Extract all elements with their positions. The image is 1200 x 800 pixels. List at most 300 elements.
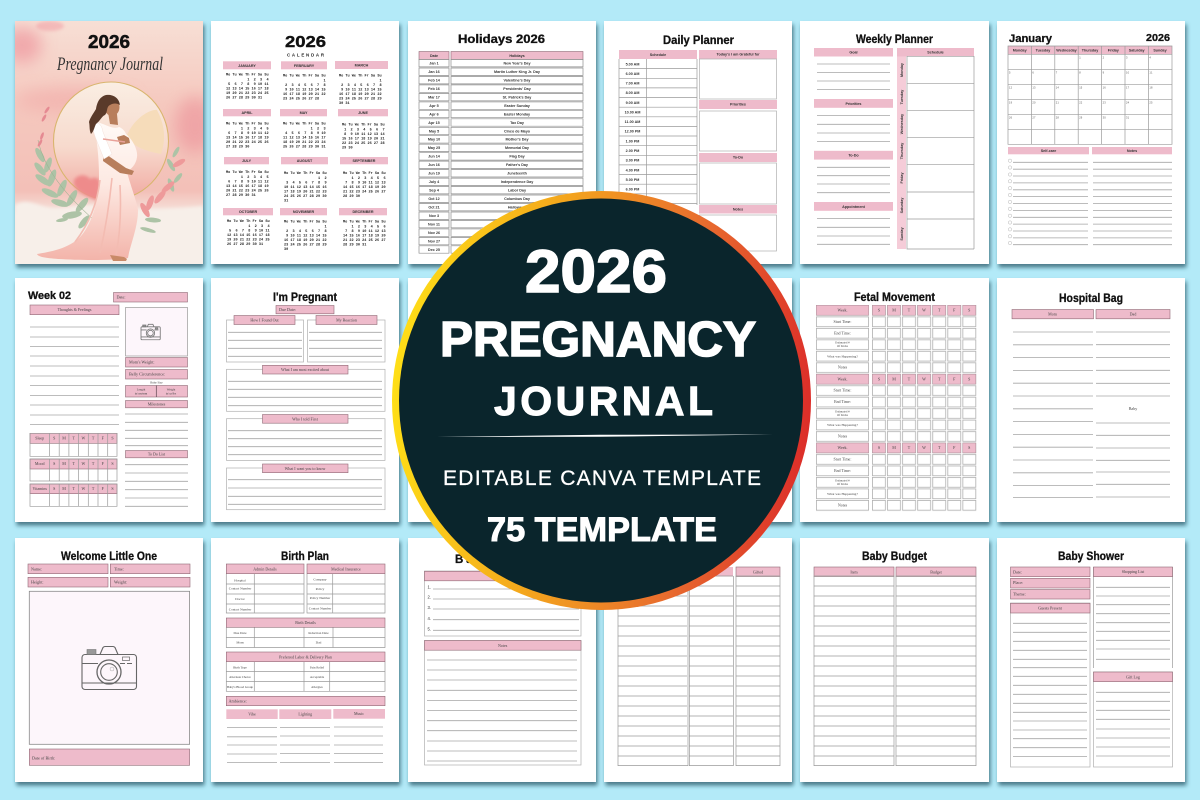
schedule column: Schedule [650,53,666,57]
names list: 5. [428,626,431,632]
mood tracker: S [111,461,114,466]
baby detail fields: Name: [31,566,42,572]
fetal movement labels: Start Time: [834,319,851,324]
vitamins tracker: S [111,486,114,491]
panel: hospital bag page [997,278,1185,522]
delivery plan table: Allergies [311,685,324,689]
fetal movement labels: Notes [838,365,848,370]
April grid: Mo Tu We Th Fr Sa Su [226,122,269,126]
told first box: Who I told First [292,416,319,421]
how I found out box: How I Found Out [250,318,280,322]
holidays table text: Nov 3 [429,214,439,218]
holidays table text: Tax Day [510,121,525,125]
fetal movement labels: Week. [837,308,848,312]
holidays title: Holidays 2026 [458,34,545,46]
welcome title: Welcome Little One [61,551,157,563]
ambience field: Ambience: [228,698,247,704]
month bars: MARCH [355,64,369,68]
holidays table text: Independence Day [501,180,534,184]
leaves: right branch [140,146,184,234]
week header rows [816,305,976,453]
schedule column: 5.00 AM [626,62,639,66]
told first box [226,414,385,460]
schedule column: 5.00 PM [626,178,639,182]
sleep tracker: F [102,436,105,440]
month dates: 262728293031 [1009,116,1130,120]
mood tracker: F [102,461,105,466]
event fields [1010,567,1090,599]
milestones [125,400,188,446]
illustration: arms [103,156,134,175]
gift table header: Gifted [753,570,763,574]
badge subheading: JOURNAL [494,378,713,424]
July grid [226,170,269,198]
holidays table text: Father's Day [506,163,529,167]
left column sections: To-Do [848,154,859,158]
weekly schedule: Schedule [927,51,944,55]
holidays table text: Labor Day [508,188,527,192]
panel: week 02 page [15,278,203,522]
holidays table text: Jan 1 [429,62,439,66]
September grid: 28 29 30 [343,195,360,199]
gift log [1094,672,1172,767]
priorities section [699,100,777,151]
December grid: 7 8 9 10 11 12 13 [343,230,386,234]
March grid: 23 24 25 26 27 28 29 [339,98,382,102]
December grid: 21 22 23 24 25 26 27 [343,239,386,243]
left column sections: Priorities [846,102,862,106]
mood tracker: Mood [35,461,44,466]
budget table grid [814,576,976,766]
panel: baby names page [408,538,596,782]
pregnant title: I'm Pregnant [273,292,337,304]
illustration: petal [127,110,164,154]
fetal movement day letters: T [938,445,941,450]
badge ring [392,191,811,610]
March grid: Mo Tu We Th Fr Sa Su [339,74,382,78]
July grid: Mo Tu We Th Fr Sa Su [226,170,269,175]
to do list [125,450,188,506]
March grid: 30 31 [339,102,350,106]
August grid: 31 [284,200,288,204]
fetal movement labels: Of Kicks [837,344,849,348]
label column cells [816,305,869,511]
birth details table [226,618,385,648]
panel: hidden page, row two column three [408,278,596,522]
December grid: 14 15 16 17 18 19 20 [343,234,386,238]
schedule column: 11.00 AM [625,120,640,124]
holidays table text: Mar 17 [428,95,440,99]
December grid: Mo Tu We Th Fr Sa Su [343,220,386,224]
fetal movement day letters [878,308,970,450]
panel: welcome little one page [15,538,203,782]
June grid: 15 16 17 18 19 20 21 [342,138,385,142]
holidays table text: Flag Day [509,155,526,159]
mom column: Mom [1048,312,1058,316]
July grid: 27 28 29 30 31 [226,194,256,198]
month bars: JULY [242,159,252,163]
schedule column: 9.00 AM [626,101,639,105]
month title: January [1009,33,1053,45]
panel: fetal movement page [800,278,989,522]
weekly schedule: Monday [900,62,904,77]
badge disc [399,198,803,602]
illustration: gold circle [54,82,168,200]
holidays table text: Feb 16 [428,87,440,91]
month dates: 12131415161718 [1009,86,1153,90]
May grid [283,122,326,150]
measurements: Mom's Weight: [129,360,155,364]
fetal movement labels: Of Kicks [837,413,849,417]
month bars [223,61,388,215]
January grid: 1 2 3 4 [226,78,269,82]
weekday header: Tuesday [1036,48,1051,52]
panel: weekly planner page [800,21,989,264]
fetal movement labels: Notes [838,502,848,507]
want you to know box: What I want you to know [285,466,325,471]
medical insurance table: Policy Number [310,596,331,600]
October grid: 19 20 21 22 23 24 25 [227,238,270,242]
self-care list: Self-care [1041,149,1056,153]
badge heading: PREGNANCY [440,313,756,367]
holidays table text: Sep 4 [429,188,440,192]
fetal movement day letters: M [892,445,896,450]
March grid: 16 17 18 19 20 21 22 [339,93,382,97]
delivery plan table [226,652,385,691]
month bars: SEPTEMBER [353,159,376,163]
November grid: 2 3 4 5 6 7 8 [284,230,327,234]
leaves: left branch [33,147,91,230]
medical insurance table: Policy [316,587,325,591]
June grid: 8 9 10 11 12 13 14 [342,133,385,137]
weekday header [1008,46,1172,54]
schedule column: 6.00 PM [626,188,639,192]
fetal movement labels [827,308,858,507]
fetal movement labels: End Time: [834,399,851,404]
August grid: 17 18 19 20 21 22 23 [284,190,327,194]
priorities section: Priorities [730,102,746,106]
gift table header [618,567,780,576]
month bars: APRIL [241,111,253,115]
to-do section [699,153,777,204]
names list: 4. [428,616,431,621]
month dates: 1234 [1079,56,1151,60]
want you to know box [226,464,385,510]
event fields: Place: [1013,580,1023,585]
August grid: 3 4 5 6 7 8 9 [284,182,327,186]
vitamins tracker: T [92,486,95,491]
week title: Week 02 [28,290,71,302]
month dates: 19202122232425 [1009,100,1153,104]
holidays table text: Presidents' Day [503,87,532,91]
holidays table text: Martin Luther King Jr. Day [494,70,541,74]
admin details table: Contact Number [229,608,252,612]
badge year: 2026 [525,238,667,305]
baby detail fields: Weight: [114,580,127,585]
weekday header: Sunday [1153,48,1168,52]
ambience field [226,696,385,706]
December grid [343,220,386,248]
panel: baby budget page [800,538,989,782]
baby detail fields: Time: [114,566,124,572]
to do list: To Do List [148,452,166,456]
holidays table text: Jun 19 [428,172,440,176]
January grid: 19 20 21 22 23 24 25 [226,92,269,96]
gift table grid [618,576,780,766]
fetal movement labels: Estimated # [835,478,850,482]
holidays table text: Nov 11 [428,222,440,226]
date field: Date: [116,294,126,300]
panel: baby shower page [997,538,1185,782]
October grid: 12 13 14 15 16 17 18 [227,234,270,238]
fetal movement day letters: T [908,308,911,312]
April grid: 20 21 22 23 24 25 26 [226,141,269,145]
July grid: 6 7 8 9 10 11 12 [226,180,269,184]
February grid: Mo Tu We Th Fr Sa Su [283,74,326,78]
fetal movement day letters: S [968,445,970,450]
holidays table text: Easter Sunday [504,104,531,108]
June grid: Mo Tu We Th Fr Sa Su [342,122,385,128]
daily planner title: Daily Planner [663,35,734,47]
February grid: 16 17 18 19 20 21 22 [283,93,326,97]
sleep tracker: W [82,436,86,440]
baby names title: Baby Names [455,554,549,566]
panel: calendar page [211,21,399,264]
holidays table text: Apr 15 [428,121,440,125]
holidays table text: Apr 5 [429,104,439,108]
month bars: JUNE [358,111,368,115]
January grid: Mo Tu We Th Fr Sa Su [226,72,269,78]
holidays table text: Feb 14 [428,78,441,82]
measurements [126,358,188,397]
admin details table: Contact Number [229,586,252,590]
birth details table: Induction Date [308,631,329,635]
dad column: Dad [1130,312,1136,316]
medical insurance table: Contact Number [309,606,332,610]
ambience columns: Lighting [298,712,312,716]
schedule column: 7.00 AM [626,82,639,86]
weekly schedule: Tuesday [900,89,904,104]
panel: January page [997,21,1185,264]
due date field: Due Date: [279,307,296,312]
May grid: Mo Tu We Th Fr Sa Su [283,122,326,126]
September grid: 1 2 3 4 5 6 [343,177,386,181]
budget table header: Item [850,570,859,574]
May grid: 25 26 27 28 29 30 31 [283,146,326,150]
September grid: Mo Tu We Th Fr Sa Su [343,171,386,176]
delivery plan table: Birth Type [233,666,247,670]
holidays table text: Nov 27 [428,239,440,243]
medical insurance table: Company [313,578,327,582]
weekly schedule: Friday [900,172,904,184]
February grid: 23 24 25 26 27 28 [283,98,319,102]
November grid [284,220,327,252]
admin details table: Admin Details [253,566,277,572]
August grid [284,171,327,204]
month year: 2026 [1146,32,1170,44]
October grid [227,219,270,247]
fetal movement labels: What was Happening? [827,423,858,427]
September grid: 21 22 23 24 25 26 27 [343,190,386,194]
icon: small camera [141,324,160,340]
August grid: 10 11 12 13 14 15 16 [284,186,327,190]
mood tracker: M [62,461,66,466]
holidays table text: May 5 [429,129,439,133]
birth details table: Due Date [234,631,247,635]
baby budget title: Baby Budget [862,551,927,563]
sleep tracker: T [92,436,95,440]
April grid: 13 14 15 16 17 18 19 [226,136,269,140]
month dates [1009,56,1153,120]
month dates: 567891011 [1009,70,1153,74]
my reaction box: My Reaction [336,318,357,322]
shopping list [1094,567,1172,668]
stems: pink buds [38,106,50,146]
October grid: Mo Tu We Th Fr Sa Su [227,219,270,224]
day cells [872,305,978,511]
measurements: in/oz/lbs [166,392,177,396]
admin details table [226,564,304,613]
sleep tracker: S [111,436,114,440]
baby detail fields [28,564,190,587]
vitamins tracker [30,484,117,506]
sleep tracker: S [53,436,55,440]
fetal movement labels: Estimated # [835,341,850,345]
fetal movement title: Fetal Movement [854,292,935,304]
November grid: 23 24 25 26 27 28 29 [284,244,327,248]
June grid: 29 30 [342,146,353,150]
names list: 3. [428,605,431,610]
holidays table text: St. Patrick's Day [503,95,532,99]
notes list [1092,147,1172,245]
holidays table header: Holidays [509,54,525,58]
May grid: 4 5 6 7 8 9 10 [283,132,326,136]
April grid: 6 7 8 9 10 11 12 [226,132,269,136]
schedule column: 12.00 PM [625,130,640,134]
holidays table text: Columbus Day [504,197,531,201]
October grid: 1 2 3 4 [227,225,270,229]
badge count: 75 TEMPLATE [487,511,717,549]
fetal movement day letters: T [908,445,911,450]
February grid [283,74,326,102]
June grid: 1 2 3 4 5 6 7 [342,128,385,132]
grateful section [699,50,777,99]
March grid: 2 3 4 5 6 7 8 [339,84,382,88]
schedule column: 2.00 PM [626,149,639,153]
month bars: JANUARY [238,64,256,68]
mood tracker [30,459,117,481]
delivery plan table: Preferred Labor & Delivery Plan [279,654,332,660]
mood tracker: T [72,461,75,466]
self-care list [1008,147,1089,245]
medical insurance table [307,564,385,613]
holidays table text: Mother's Day [505,138,529,142]
July grid: 20 21 22 23 24 25 26 [226,190,269,194]
March grid: 9 10 11 12 13 14 15 [339,88,382,92]
February grid: 2 3 4 5 6 7 8 [283,84,326,88]
dad column: Baby [1129,406,1137,411]
photo frame [29,591,190,744]
left column sections: Appointment [842,205,866,209]
holidays table text: Jun 16 [428,163,440,167]
calendar subtitle: CALENDAR [287,52,325,58]
measurements: Length [137,388,146,392]
June grid: 22 23 24 25 26 27 28 [342,142,385,146]
holidays table text: May 10 [428,138,440,142]
birth plan title: Birth Plan [281,551,329,563]
August grid: 24 25 26 27 28 29 30 [284,195,327,199]
month bars: DECEMBER [352,210,374,214]
June grid [342,122,385,150]
January grid [226,72,269,100]
delivery plan table: Alternate Choice [229,675,251,679]
ambience columns: Music [354,711,364,716]
fetal movement day letters: M [892,376,896,381]
panel: gift table page [604,538,792,782]
April grid [226,122,269,150]
fetal movement day letters: F [953,376,956,381]
weekday header: Wednesday [1056,48,1078,52]
birth details table: Birth Details [295,620,316,625]
holidays table text: Oct 21 [428,206,440,210]
event fields: Theme: [1013,592,1026,596]
fetal movement labels: Estimated # [835,410,850,414]
sleep tracker: M [62,436,66,440]
weekly schedule: Saturday [900,197,904,213]
holidays table text [428,62,541,252]
gift log: Gift Log [1126,674,1140,680]
August grid: 1 2 [284,177,327,181]
dad column [1096,310,1170,497]
schedule column: 3.00 PM [626,159,639,163]
date of birth field: Date of Birth: [32,756,55,760]
excited box: What I am most excited about [281,367,330,372]
my reaction box [308,316,385,362]
left column sections: Goal [849,51,858,55]
October grid: 5 6 7 8 9 10 11 [227,230,270,234]
fetal movement labels: Week. [837,376,848,381]
month bars: AUGUST [297,159,313,163]
November grid: 30 [284,248,288,252]
delivery plan table: Acceptable [310,675,325,679]
budget table header: Budget [930,570,943,574]
sleep tracker [30,433,117,456]
weekly schedule: Wednesday [900,113,904,134]
holidays table text: Jun 14 [428,155,441,159]
to-do section: To-Do [733,156,744,160]
panel: daily planner page [604,21,792,264]
icon: camera [82,646,136,690]
vitamins tracker: S [53,486,55,491]
fetal movement day letters: W [922,376,926,381]
schedule column: 10.00 AM [625,110,640,114]
holidays table rows [419,60,583,253]
fetal movement day letters: W [922,308,926,312]
weekday header: Saturday [1129,48,1146,52]
October grid: 26 27 28 29 30 31 [227,243,263,247]
holidays table text: July 4 [429,180,440,184]
May grid: 11 12 13 14 15 16 17 [283,136,326,140]
July grid: 1 2 3 4 5 [226,176,269,180]
cover year: 2026 [88,32,130,52]
fetal movement day letters: S [878,308,880,312]
measurements: Baby Size [150,380,163,384]
names list: 2. [428,594,431,600]
August grid: Mo Tu We Th Fr Sa Su [284,171,327,176]
fetal movement labels: Start Time: [834,456,851,462]
badge tagline: EDITABLE CANVA TEMPLATE [443,467,761,490]
April grid: 1 2 3 4 5 [226,128,269,132]
